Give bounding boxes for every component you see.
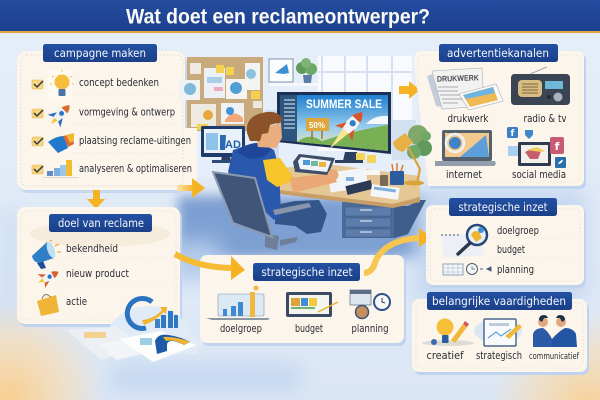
arrow: campagne to desk <box>177 178 205 198</box>
arrow: center to right strategische inzet <box>364 228 432 273</box>
skill: creatief <box>422 318 474 362</box>
item: analyseren en optimaliseren: analyseren & optimaliseren <box>79 163 192 175</box>
channel: drukwerk <box>427 68 503 125</box>
central illustration: designer at desk <box>185 52 426 250</box>
price tag: 50% <box>309 121 325 130</box>
arrow: doel to center strategische inzet <box>175 254 245 280</box>
desk lamp and plant <box>393 125 432 186</box>
panel heading <box>49 214 152 232</box>
item: doelgroep <box>441 225 572 258</box>
skill: communicatief: communicatief <box>529 352 580 362</box>
skill: creatief: creatief <box>426 349 464 362</box>
hoodie <box>228 143 281 220</box>
goal: bekendheid: bekendheid <box>66 243 118 255</box>
panel heading: strategische inzet <box>458 200 548 214</box>
pin board <box>187 57 263 131</box>
head <box>255 122 282 148</box>
item: plaatsing reclame-uitingen <box>32 133 191 153</box>
panel heading <box>449 198 557 216</box>
goal: nieuw product <box>34 265 174 290</box>
skill: strategisch: strategisch <box>476 350 522 362</box>
panel heading: advertentiekanalen <box>447 46 549 60</box>
title: Wat doet een reclameontwerper? <box>126 6 430 28</box>
item: budget: budget <box>295 323 323 335</box>
item: plaatsing reclame-uitingen: plaatsing reclame-uitingen <box>79 135 191 147</box>
item: budget <box>286 292 338 335</box>
rocket <box>321 105 371 157</box>
goal: actie: actie <box>66 296 87 308</box>
goal: bekendheid <box>32 240 174 269</box>
main monitor <box>277 92 391 163</box>
channel: social media: f <box>511 129 515 139</box>
framed poster <box>269 59 293 82</box>
item: vormgeving en ontwerp: vormgeving & ontwerp <box>79 106 175 118</box>
panel heading <box>253 263 360 281</box>
channel: social media: f <box>555 140 560 153</box>
panel: advertentiekanalen <box>414 44 586 189</box>
channel: social media: social media <box>512 169 566 181</box>
arrow: campagne to doel <box>87 190 105 209</box>
panel: doel van reclame <box>17 207 182 327</box>
item: budget: budget <box>497 244 525 256</box>
illustration: charts and reports <box>67 298 204 362</box>
item: planning: planning <box>497 264 534 276</box>
panel heading: campagne maken <box>54 46 146 60</box>
panel: campagne maken <box>17 44 197 193</box>
item: doelgroep: doelgroep <box>497 225 539 237</box>
armrest <box>273 203 311 215</box>
shelf with plant <box>270 58 318 86</box>
loose sketch sheet on board edge <box>179 80 200 100</box>
yellow sleeve <box>263 158 295 187</box>
tablet <box>293 154 335 175</box>
panel: belangrijke vaardigheden <box>412 292 589 375</box>
channel: internet <box>435 130 496 181</box>
channel: internet: internet <box>446 169 482 181</box>
legs <box>275 200 327 234</box>
side monitor with AD: AD <box>225 139 241 151</box>
item: planning <box>443 264 534 276</box>
item: concept bedenken: concept bedenken <box>79 77 159 89</box>
panel heading: doel van reclame <box>58 216 144 230</box>
desk <box>280 153 426 238</box>
channel: drukwerk: drukwerk <box>448 113 489 125</box>
item: vormgeving en ontwerp <box>32 99 176 130</box>
channel: radio and tv <box>511 67 570 125</box>
item: doelgroep <box>206 286 270 335</box>
item: doelgroep: doelgroep <box>220 323 262 335</box>
goal: nieuw product: nieuw product <box>66 268 129 280</box>
panel heading: strategische inzet <box>262 265 353 279</box>
header banner <box>0 0 600 33</box>
panel heading: belangrijke vaardigheden <box>432 294 566 308</box>
skill: communicatief <box>529 315 580 362</box>
goal: actie <box>37 294 87 316</box>
item: planning: planning <box>352 323 388 335</box>
chair base <box>265 234 298 250</box>
item: concept bedenken <box>32 70 176 101</box>
chair back <box>213 172 272 237</box>
screen headline: SUMMER SALE <box>306 97 382 111</box>
arm <box>290 173 337 193</box>
item: planning <box>350 290 390 335</box>
skill: strategisch <box>474 319 522 362</box>
background wash <box>0 183 600 400</box>
pen cup <box>390 163 404 185</box>
panel: strategische inzet right <box>426 198 586 288</box>
channel: radio and tv: radio & tv <box>524 113 566 125</box>
designer seat and body <box>213 112 338 250</box>
hair <box>247 112 283 141</box>
channel: social media <box>507 127 566 181</box>
window wall <box>185 52 417 177</box>
channel: drukwerk: DRUKWERK <box>437 73 479 84</box>
item: analyseren en optimaliseren <box>32 160 192 178</box>
arrow: desk to advertentiekanalen <box>399 81 420 99</box>
item: budget <box>490 244 572 258</box>
side monitor with AD <box>201 126 245 163</box>
panel: strategische inzet center <box>200 255 406 346</box>
